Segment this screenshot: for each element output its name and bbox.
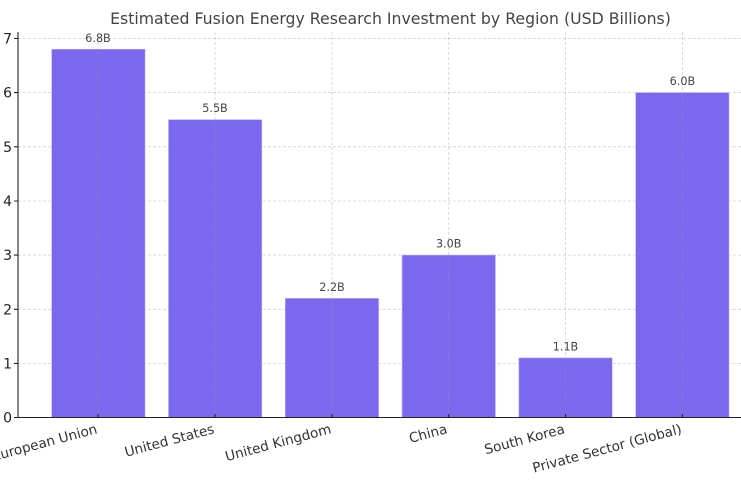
bars <box>52 49 729 418</box>
x-axis category labels: United States <box>123 421 216 461</box>
value labels: 1.1B <box>553 340 578 354</box>
value labels: 6.0B <box>670 75 695 88</box>
y-axis tick labels <box>3 32 12 426</box>
bar: United Kingdom <box>285 298 379 418</box>
value labels <box>85 32 695 354</box>
value labels: 2.2B <box>319 281 345 294</box>
x-axis category labels: China <box>407 421 449 447</box>
x-axis category labels: United Kingdom <box>224 421 333 465</box>
x-axis category labels <box>0 421 684 477</box>
value labels: 3.0B <box>436 238 461 250</box>
bar: South Korea <box>519 358 612 418</box>
y-axis tick labels: 7 <box>3 32 12 48</box>
value labels: 5.5B <box>202 102 228 115</box>
bar: European Union <box>52 49 145 418</box>
bar: Private Sector (Global) <box>636 93 729 417</box>
y-axis tick labels: 1 <box>3 356 12 372</box>
bar: China <box>402 255 495 418</box>
bar: United States <box>168 120 262 417</box>
y-axis tick labels: 5 <box>3 140 12 156</box>
y-axis tick labels: 4 <box>3 194 12 210</box>
y-axis tick labels: 0 <box>3 410 12 426</box>
y-axis tick labels: 3 <box>3 248 12 264</box>
x-axis category labels: Private Sector (Global) <box>531 421 684 477</box>
x-axis category labels: South Korea <box>483 421 567 458</box>
y-axis tick labels: 2 <box>3 302 12 318</box>
axes <box>14 32 741 418</box>
chart title: Estimated Fusion Energy Research Investment by Region (USD Billions) <box>110 9 671 28</box>
value labels: 6.8B <box>85 32 111 45</box>
y-axis tick labels: 6 <box>3 86 12 102</box>
